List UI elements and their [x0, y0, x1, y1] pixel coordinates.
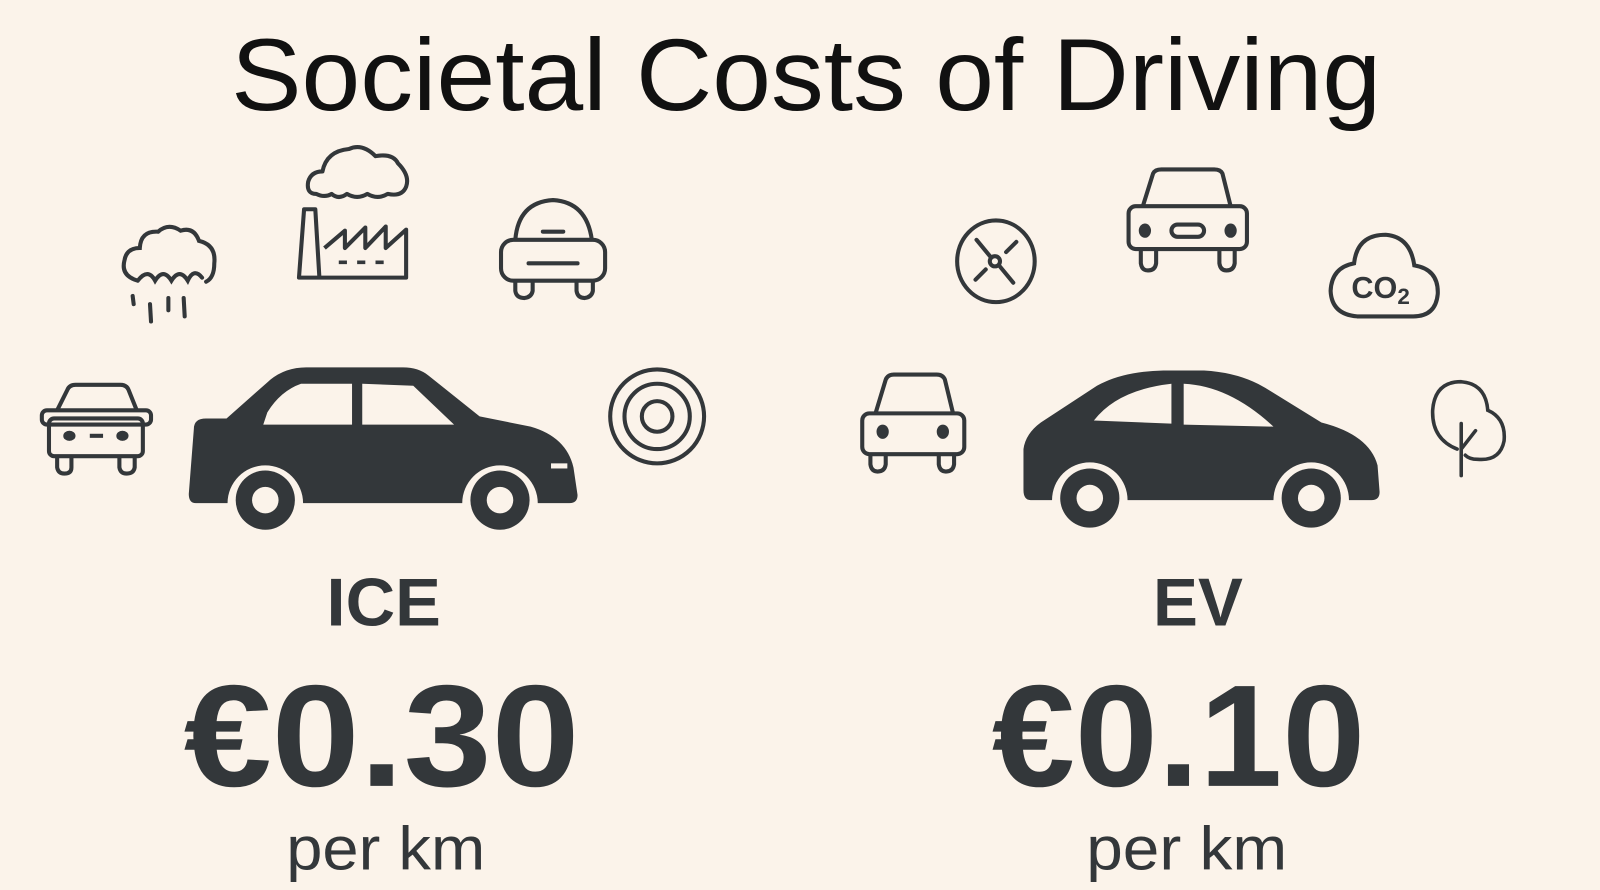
icon: wheel	[957, 220, 1035, 302]
title: Societal Costs of Driving	[231, 18, 1381, 132]
icon: CO2 cloud: 2	[1397, 284, 1410, 309]
icon: ICE car silhouette	[189, 367, 578, 530]
heading: ICE: ICE	[327, 566, 441, 641]
icon: CO2 cloud	[1331, 235, 1438, 316]
icon: small car front	[42, 385, 151, 474]
icon: EV car silhouette	[1023, 370, 1380, 528]
panel: ICE	[42, 147, 704, 883]
icon: tree	[1433, 382, 1504, 476]
heading: EV: EV	[1153, 566, 1243, 641]
value: EV cost: €0.10	[992, 655, 1365, 817]
icon: factory with smoke	[299, 147, 407, 278]
icon: dome car	[501, 200, 605, 298]
unit: ICE: per km	[286, 815, 485, 883]
icon: CO2 cloud: CO	[1351, 271, 1397, 305]
icon: car front	[1129, 169, 1247, 270]
unit: EV: per km	[1086, 815, 1287, 883]
value: ICE cost: €0.30	[184, 655, 580, 817]
icon: target	[610, 369, 704, 463]
panel: EV	[862, 169, 1504, 883]
icon: small car front	[862, 375, 964, 472]
icon: rain cloud	[124, 227, 215, 322]
